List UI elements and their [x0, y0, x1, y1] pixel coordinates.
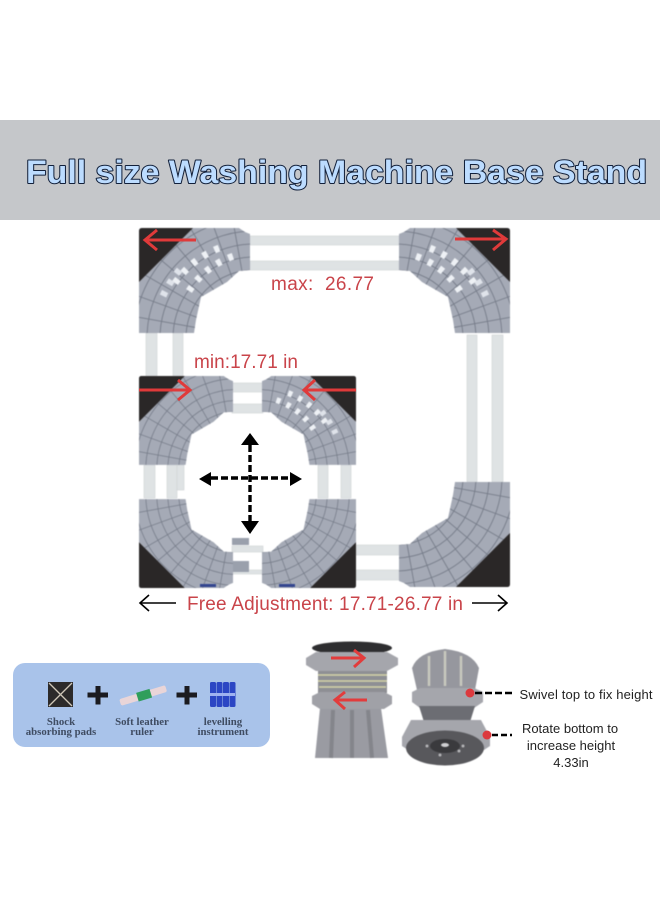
arrow: small frame left inward	[139, 380, 190, 400]
title: Full size Washing Machine Base Stand	[26, 154, 647, 190]
product: large frame at maximum size	[87, 171, 562, 644]
label: shock absorbing pads: absorbing pads	[26, 726, 96, 738]
arrow: rotate bottom	[335, 692, 367, 709]
arrow: free adjustment right	[472, 595, 507, 611]
icon: levelling instrument	[210, 682, 236, 707]
panel: accessories	[13, 663, 270, 747]
label: max size: max: 26.77	[271, 274, 374, 295]
icon: soft leather ruler	[119, 684, 167, 707]
product: small frame at minimum size	[95, 328, 400, 636]
icon: shock pad	[48, 682, 73, 707]
label: swivel top: Swivel top to fix height	[520, 687, 653, 702]
arrow: swivel top	[331, 650, 364, 667]
arrow: small frame right inward	[304, 380, 356, 400]
product: adjustable foot, underside view	[402, 649, 490, 766]
label: levelling instrument: levelling	[204, 716, 242, 728]
label: soft leather ruler: Soft leather	[115, 716, 169, 728]
label: soft leather ruler: ruler	[130, 726, 154, 738]
callout: swivel top	[466, 688, 512, 698]
label: min size: min:17.71 in	[194, 352, 298, 373]
arrow: top right outward	[455, 230, 506, 250]
icon: plus	[176, 686, 197, 704]
icon: four way adjustment cross	[199, 433, 302, 534]
label: rotate bottom: increase height	[527, 738, 615, 753]
title banner	[0, 120, 660, 220]
product: adjustable foot, side view	[306, 642, 398, 758]
icon: plus	[88, 686, 108, 704]
label: shock absorbing pads: Shock	[47, 716, 75, 728]
label: rotate bottom: 4.33in	[553, 755, 589, 770]
arrow: free adjustment left	[140, 595, 176, 611]
callout: rotate bottom	[482, 730, 512, 740]
label: free adjustment range: Free Adjustment: 17.71-26.77 in	[187, 594, 463, 615]
label: levelling instrument: instrument	[198, 726, 249, 738]
arrow: top left outward	[145, 230, 196, 250]
label: rotate bottom: Rotate bottom to	[522, 721, 618, 736]
